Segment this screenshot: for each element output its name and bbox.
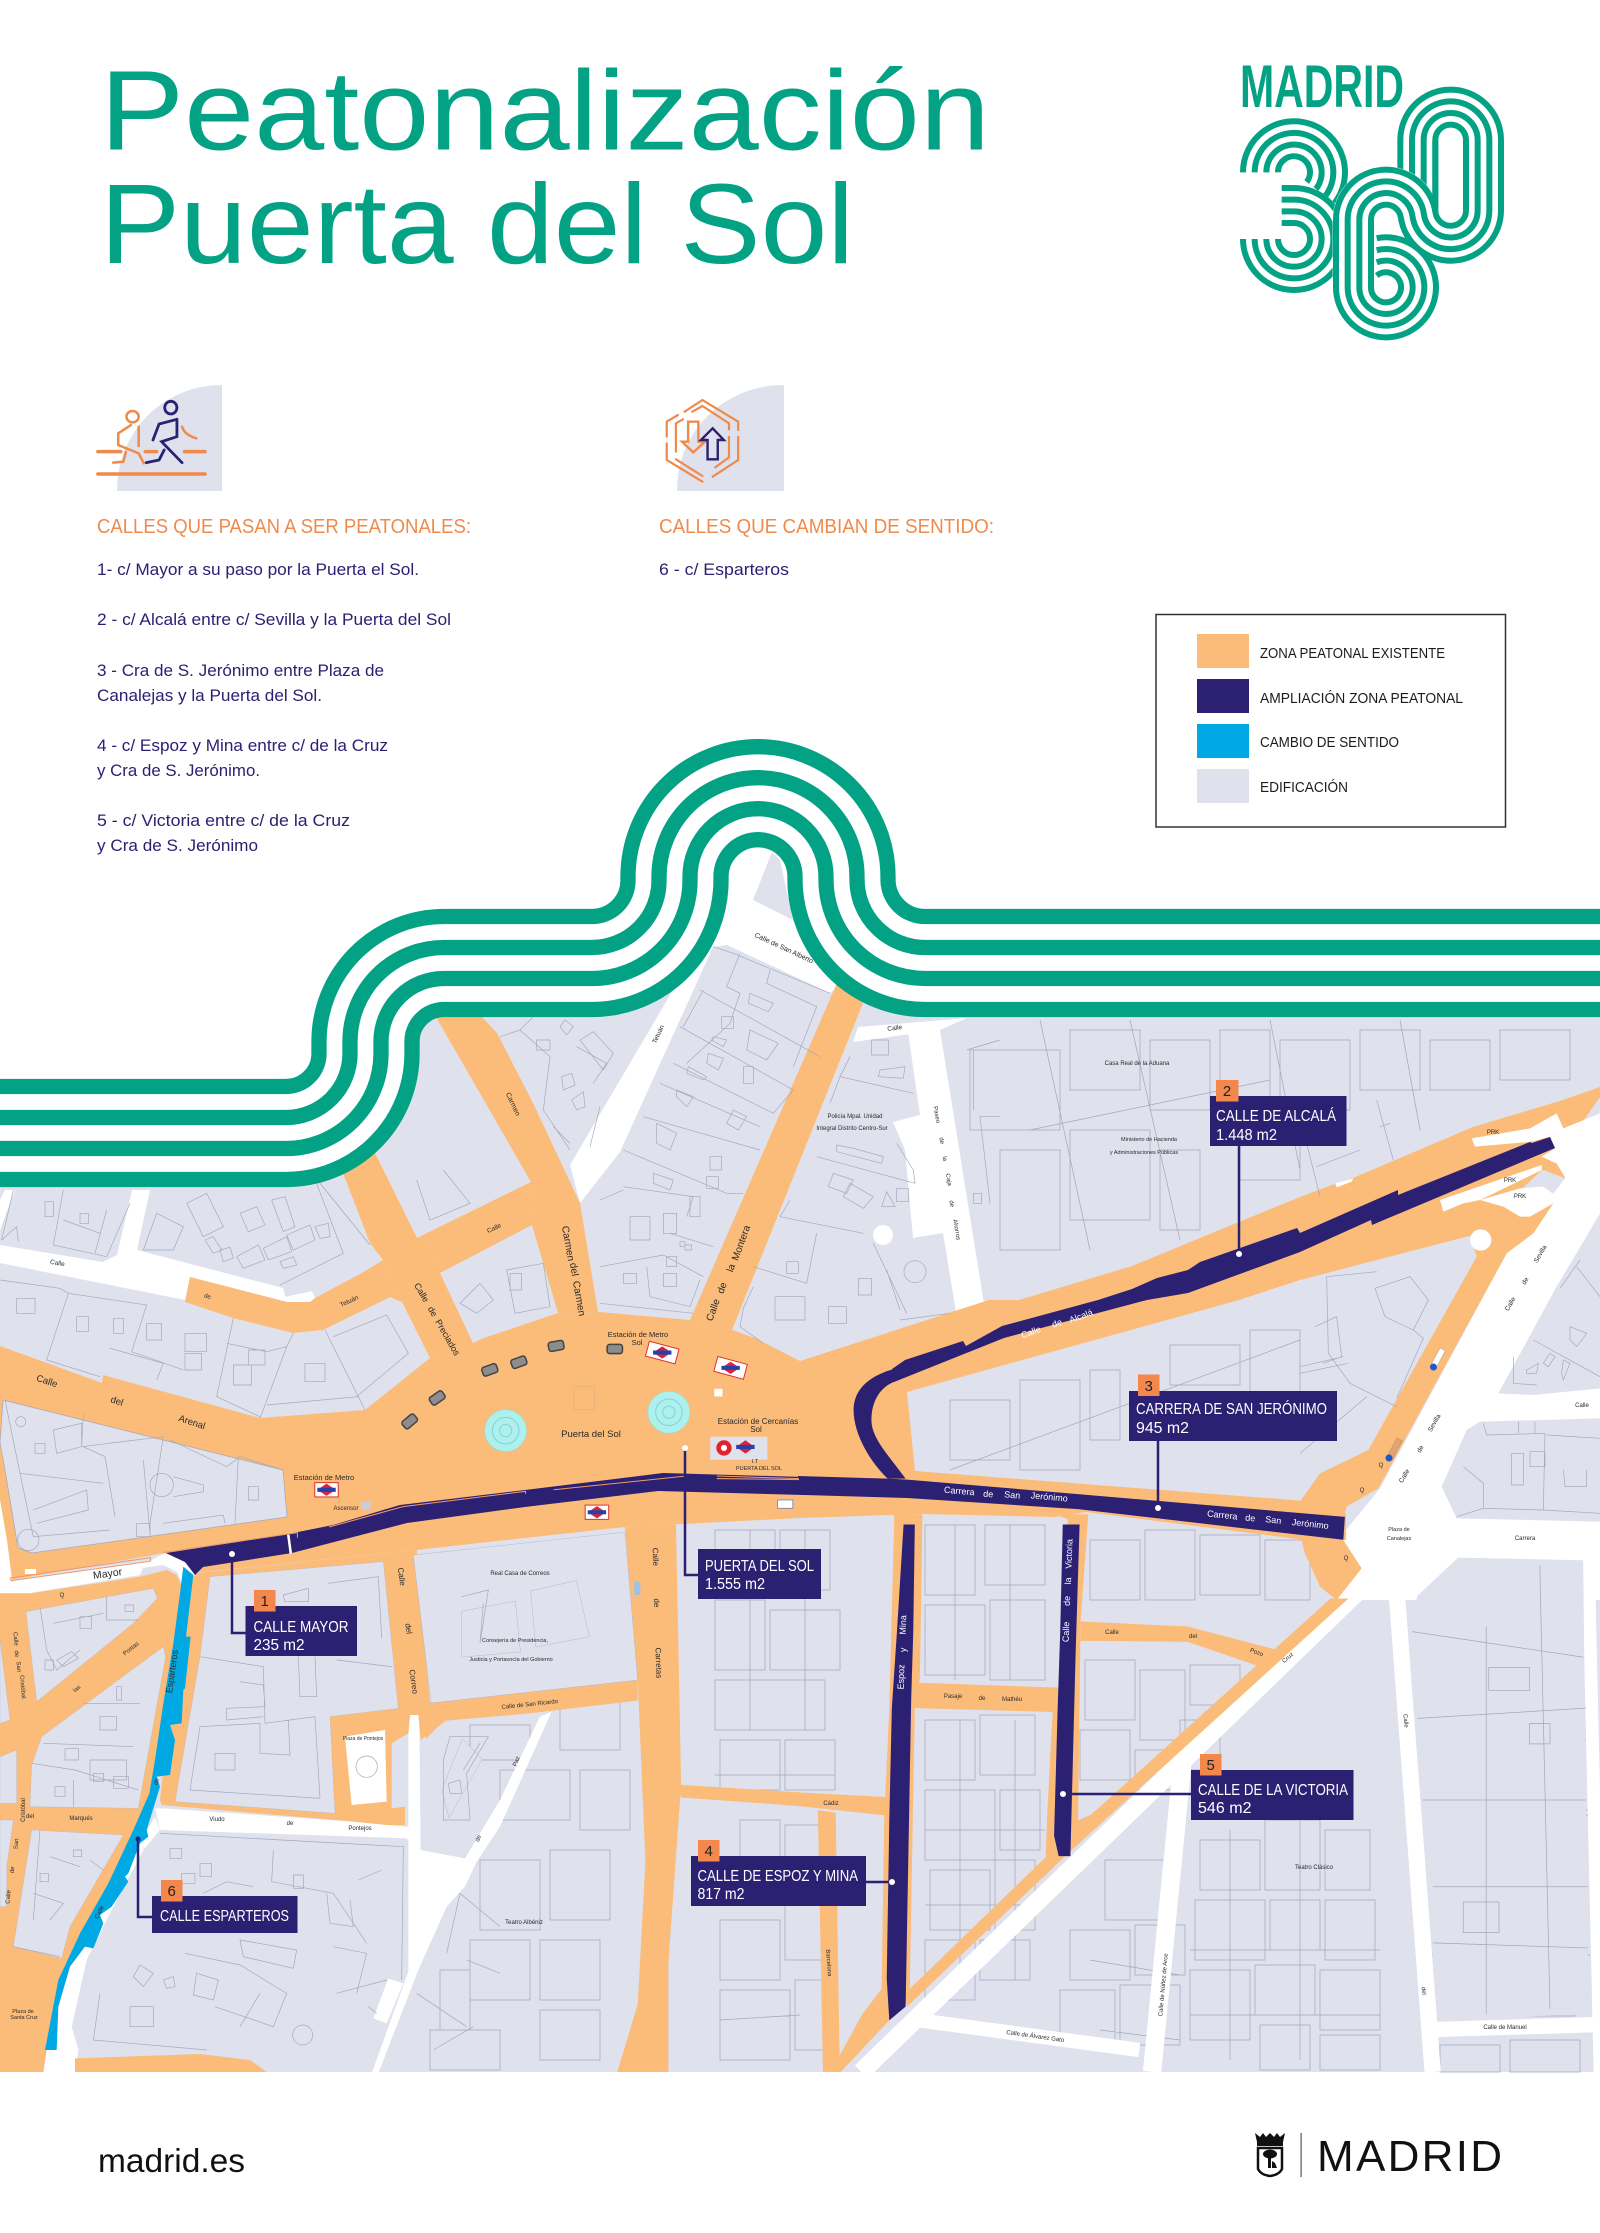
map street and building labels: Tetuán [651, 1024, 666, 1045]
map street and building labels: Q [60, 1593, 65, 1599]
map street and building labels: Carrera [1515, 1536, 1536, 1542]
map street and building labels: Sevilla [1533, 1244, 1549, 1264]
icon: pedestrians walking [98, 385, 222, 491]
map street and building labels: de [13, 1650, 19, 1658]
map street and building labels: Calle [1504, 1296, 1518, 1312]
map street and building labels: del [1189, 1634, 1197, 1640]
heading: streets becoming pedestrian: CALLES QUE PASAN A SER PEATONALES: [97, 515, 471, 538]
map street and building labels: Carrera [1207, 1508, 1238, 1522]
logo: Madrid 360: MADRID [1240, 53, 1404, 120]
callout 1: Calle Mayor [229, 1551, 357, 1656]
map street and building labels: Calle [1575, 1403, 1589, 1409]
callout: Puerta del Sol: PUERTA DEL SOL [705, 1558, 814, 1575]
map street and building labels: PUERTA DEL SOL [736, 1466, 782, 1472]
map street and building labels: Calle [705, 1297, 723, 1323]
expansion zone: navy pedestrian streets [166, 1137, 1555, 2020]
list: pedestrian streets: 4 - c/ Espoz y Mina entre c/ de la Cruz [97, 737, 388, 755]
map street and building labels: de [1521, 1276, 1531, 1286]
map street and building labels: Esparteros [164, 1649, 180, 1694]
map street and building labels: San [1265, 1514, 1282, 1526]
map street and building labels: la [1063, 1577, 1073, 1585]
white mask above the green stripes [0, 0, 1600, 1180]
callout 4: Calle de Espoz y Mina: 817 m2 [698, 1886, 745, 1903]
map street and building labels: del [403, 1623, 414, 1635]
map street and building labels: y Administraciones Públicas [1110, 1150, 1178, 1156]
map street and building labels: Calle [1401, 1714, 1409, 1729]
map street and building labels: Calle [651, 1548, 660, 1567]
map street and building labels: de [983, 1489, 994, 1499]
map street and building labels: la [941, 1156, 947, 1162]
map street and building labels: Calle [396, 1567, 407, 1587]
green wave stripes [0, 747, 1600, 1180]
callout: Puerta del Sol: 1.555 m2 [705, 1576, 765, 1593]
map street and building labels: Mina [898, 1615, 908, 1635]
map street and building labels: Caja [944, 1173, 952, 1187]
map: street plan of Puerta del Sol [0, 852, 1600, 2073]
map street and building labels: de [203, 1293, 212, 1301]
map street and building labels: las [72, 1684, 82, 1694]
map street and building labels: Consejería de Presidencia, [482, 1638, 548, 1644]
map street and building labels: de [947, 1200, 955, 1208]
plaza details: fountains, kiosks, metro signs [10, 1340, 798, 1595]
map street and building labels: Cristóbal [18, 1675, 26, 1699]
map street and building labels: Estación de Metro [294, 1473, 354, 1482]
map street and building labels: Ahorros [951, 1219, 961, 1241]
callout 5: Calle de la Victoria: CALLE DE LA VICTORIA [1198, 1782, 1348, 1799]
map street and building labels: del [567, 1262, 580, 1277]
map street and building labels: Calle [5, 1889, 13, 1904]
building blocks over the orange [0, 1400, 638, 1958]
map street and building labels: Mathéu [1002, 1697, 1022, 1703]
callout 5: Calle de la Victoria: 546 m2 [1198, 1800, 1252, 1817]
map street and building labels: Calle [1020, 1324, 1042, 1340]
map street and building labels: Calle de Manuel [1483, 2025, 1527, 2031]
map street and building labels: de [652, 1598, 661, 1608]
map street and building labels: del [26, 1814, 34, 1820]
map street and building labels: I.T [752, 1459, 759, 1465]
map street and building labels: Pontejos [348, 1826, 372, 1832]
map street and building labels: Calle de San Alberto [753, 932, 814, 965]
map street and building labels: Q [1344, 1556, 1349, 1562]
title: Peatonalización [100, 48, 990, 174]
callout 1: Calle Mayor: 235 m2 [254, 1637, 305, 1654]
callout 4: Calle de Espoz y Mina [691, 1840, 895, 1906]
logo: Madrid 360 [1240, 53, 1504, 341]
map street and building labels: Canalejas [1387, 1536, 1411, 1542]
map street and building labels: de [937, 1137, 945, 1145]
map street and building labels: Estación de Cercanías [718, 1417, 798, 1426]
list: pedestrian streets: 2 - c/ Alcalá entre c/ Sevilla y la Puerta del Sol [97, 611, 451, 629]
legend [1156, 614, 1506, 827]
map street and building labels: Pozo [1249, 1648, 1264, 1658]
map street and building labels: Calle [1105, 1630, 1119, 1636]
callout 1: Calle Mayor: CALLE MAYOR [254, 1619, 348, 1636]
map street and building labels: de [1062, 1596, 1072, 1606]
legend: EDIFICACIÓN [1260, 779, 1348, 796]
map street and building labels: de [1416, 1444, 1426, 1454]
callout 2: Calle de Alcalá: 1.448 m2 [1216, 1127, 1277, 1144]
map street and building labels: Calle de Núñez de Arce [1158, 1953, 1170, 2017]
list: pedestrian streets: y Cra de S. Jerónimo [97, 837, 258, 855]
title: Puerta del Sol [100, 161, 854, 287]
map street and building labels: Preciados [433, 1318, 462, 1358]
map street and building labels: y [898, 1647, 908, 1652]
map street and building labels: Calle [1398, 1468, 1412, 1484]
map street and building labels: Calle [1061, 1621, 1071, 1642]
map street and building labels: Calle [486, 1222, 503, 1235]
map street and building labels: del [109, 1394, 125, 1409]
map street and building labels: Teatro Clásico [1295, 1865, 1334, 1871]
map street and building labels: Mayor [92, 1566, 123, 1582]
footer: website: madrid.es [98, 2142, 245, 2179]
map street and building labels: Paz [512, 1756, 522, 1768]
map street and building labels: Integral Distrito Centro-Sur [816, 1126, 888, 1132]
map street and building labels: Teatro Albéniz [505, 1920, 543, 1926]
list: pedestrian streets: 1- c/ Mayor a su paso por la Puerta el Sol. [97, 561, 419, 579]
map street and building labels: Viudo [209, 1817, 225, 1823]
legend: ZONA PEATONAL EXISTENTE [1260, 645, 1445, 662]
map street and building labels: Calle [49, 1259, 66, 1268]
map street and building labels: Montera [730, 1224, 753, 1262]
map street and building labels: Q [1360, 1488, 1365, 1494]
map street and building labels: de [10, 1866, 16, 1874]
traced building outlines [0, 947, 1600, 2050]
map street and building labels: de [426, 1305, 439, 1318]
map street and building labels: Plaza de Pontejos [343, 1736, 384, 1742]
icon: direction change hexagon [667, 385, 784, 491]
callout 2: Calle de Alcalá: CALLE DE ALCALÁ [1216, 1106, 1336, 1125]
map street and building labels: Calle [887, 1024, 903, 1033]
map street and building labels: Puerta del Sol [561, 1429, 621, 1440]
map street and building labels: Real Casa de Correos [490, 1571, 550, 1577]
map street and building labels: Q [1379, 1463, 1384, 1469]
callout 3: Carrera de San Jerónimo: 945 m2 [1136, 1420, 1189, 1437]
existing pedestrian zone (orange) [0, 983, 1600, 2072]
map street and building labels: Marqués [69, 1816, 93, 1822]
callout 4: Calle de Espoz y Mina: 4 [705, 1843, 713, 1860]
map street and building labels: Carretas [653, 1647, 664, 1678]
map street and building labels: Paseo [932, 1106, 941, 1124]
map street and building labels: de [1051, 1317, 1063, 1330]
callout 5: Calle de la Victoria [1060, 1754, 1354, 1820]
direction change: Esparteros blue street [45, 1567, 193, 2050]
map street and building labels: Tetuán [339, 1294, 360, 1309]
footer logo: Ayuntamiento de Madrid: MADRID [1317, 2132, 1502, 2181]
map street and building labels: Ascensor [333, 1506, 359, 1512]
map street and building labels: Postas [122, 1641, 140, 1657]
non-pedestrian white streets [0, 852, 1600, 2073]
map street and building labels: Calle de Álvarez Gato [1006, 2029, 1065, 2044]
map street and building labels: Calle de San Ricardo [501, 1699, 559, 1711]
map street and building labels: Santa Cruz [10, 2015, 38, 2021]
map street and building labels: Calle [11, 1632, 19, 1647]
map street and building labels: San [1004, 1489, 1021, 1501]
map street and building labels: Arenal [177, 1413, 207, 1432]
map street and building labels: del [1420, 1987, 1426, 1995]
legend: CAMBIO DE SENTIDO [1260, 734, 1399, 751]
map street and building labels: San [14, 1838, 20, 1849]
map street and building labels: Calle [412, 1281, 431, 1304]
callout 3: Carrera de San Jerónimo [1129, 1374, 1337, 1511]
map street and building labels: Correo [407, 1669, 420, 1695]
map street and building labels: PRK [1504, 1178, 1516, 1184]
white squares and parking strips over orange [0, 1113, 1600, 1805]
map street and building labels: Carmen [559, 1225, 576, 1262]
map street and building labels: Carmen [504, 1092, 521, 1117]
map street and building labels: Alcalá [1068, 1307, 1094, 1325]
map street and building labels: Plaza de [1388, 1527, 1410, 1533]
map street and building labels: Cristóbal [21, 1798, 27, 1822]
callout 6: Calle Esparteros: 6 [168, 1883, 176, 1900]
list: pedestrian streets: Canalejas y la Puerta del Sol. [97, 687, 322, 705]
map street and building labels: Pasaje [944, 1694, 963, 1700]
callout: Puerta del Sol [682, 1445, 821, 1599]
map street and building labels: PRK [1487, 1130, 1499, 1136]
map street and building labels: Policía Mpal. Unidad [827, 1114, 883, 1120]
map street and building labels: Carmen [570, 1280, 587, 1317]
map street and building labels: Barcelona [824, 1949, 832, 1977]
callout 6: Calle Esparteros [136, 1836, 298, 1933]
callout 2: Calle de Alcalá: 2 [1223, 1083, 1231, 1100]
map street and building labels: de [475, 1834, 483, 1843]
map street and building labels: Cruz [1282, 1652, 1295, 1665]
map street and building labels: Ministerio de Hacienda [1121, 1137, 1178, 1143]
heading: streets changing direction: CALLES QUE CAMBIAN DE SENTIDO: [659, 515, 994, 538]
map street and building labels: de [287, 1821, 294, 1827]
map street and building labels: PRK [1514, 1194, 1526, 1200]
callout 5: Calle de la Victoria: 5 [1207, 1757, 1215, 1774]
list: pedestrian streets: 5 - c/ Victoria entre c/ de la Cruz [97, 812, 350, 830]
callout 4: Calle de Espoz y Mina: CALLE DE ESPOZ Y MINA [698, 1868, 858, 1885]
list: direction change streets: 6 - c/ Esparteros [659, 561, 789, 579]
map street and building labels: Victoria [1063, 1539, 1075, 1569]
map street and building labels: la [725, 1262, 738, 1274]
map street and building labels: Sol [750, 1425, 762, 1434]
legend: AMPLIACIÓN ZONA PEATONAL [1260, 690, 1463, 707]
map street and building labels: de [979, 1696, 986, 1702]
callout 3: Carrera de San Jerónimo: 3 [1145, 1378, 1153, 1395]
list: pedestrian streets: y Cra de S. Jerónimo. [97, 762, 260, 780]
map street and building labels: Calle [35, 1373, 59, 1390]
map street and building labels: Carrera [944, 1485, 975, 1497]
map street and building labels: Calle [94, 1905, 106, 1920]
map street and building labels: Estación de Metro [608, 1330, 668, 1339]
map street and building labels: Sol [632, 1338, 643, 1347]
map street and building labels: Sevilla [1427, 1413, 1443, 1433]
map street and building labels: de [1245, 1513, 1256, 1524]
list: pedestrian streets [97, 561, 451, 855]
map street and building labels: de [716, 1281, 730, 1295]
map street and building labels: Jerónimo [1291, 1517, 1329, 1531]
list: pedestrian streets: 3 - Cra de S. Jerónimo entre Plaza de [97, 662, 384, 680]
map street and building labels: Cádiz [823, 1801, 839, 1807]
map street and building labels: Espoz [896, 1664, 906, 1690]
bus stops on Calle de Sevilla [1386, 1348, 1445, 1462]
title [100, 48, 990, 287]
map street and building labels: San [15, 1661, 21, 1672]
map street and building labels [5, 932, 1589, 2044]
callout 3: Carrera de San Jerónimo: CARRERA DE SAN JERÓNIMO [1136, 1399, 1327, 1418]
map street and building labels: Justicia y Portavocía del Gobierno [469, 1657, 553, 1663]
map street and building labels: Plaza de [12, 2009, 34, 2015]
map street and building labels: Casa Real de la Aduana [1105, 1061, 1170, 1067]
callout 6: Calle Esparteros: CALLE ESPARTEROS [160, 1908, 289, 1925]
map street and building labels: Jerónimo [1030, 1490, 1068, 1504]
callout 2: Calle de Alcalá [1210, 1080, 1346, 1257]
map street and building labels: de [153, 1777, 161, 1786]
callout 1: Calle Mayor: 1 [261, 1593, 269, 1610]
